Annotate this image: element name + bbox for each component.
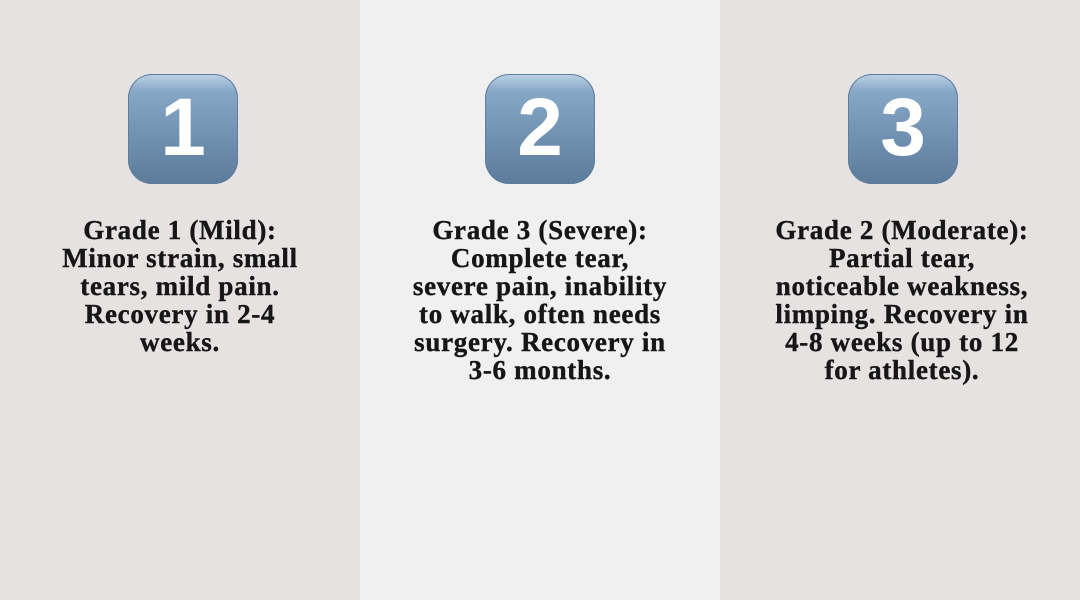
text: grade 2: Partial tear, [829,243,975,273]
icon: number 3 [848,74,958,184]
text: grade 2: Grade 2 (Moderate): [775,215,1029,245]
text: grade 1: weeks. [140,327,220,357]
text: grade 3 [413,215,667,385]
panel: grade 1 [0,0,360,600]
text: grade 1 [62,215,298,357]
text: grade 2: limping. Recovery in [775,299,1029,329]
text: grade 2: noticeable weakness, [776,271,1028,301]
icon: number 3: 3 [880,82,926,173]
text: grade 2: for athletes). [825,355,979,385]
text: grade 3: to walk, often needs [419,299,661,329]
text: grade 1: tears, mild pain. [80,271,280,301]
text: grade 1: Recovery in 2-4 [85,299,275,329]
text: grade 1: Minor strain, small [62,243,298,273]
text: grade 3: severe pain, inability [413,271,667,301]
icon: number 2 [485,74,595,184]
icon: number 1 [128,74,238,184]
text: grade 3: Grade 3 (Severe): [432,215,648,245]
text: grade 3: 3-6 months. [469,355,611,385]
panel: grade 2 [720,0,1080,600]
text: grade 2 [775,215,1029,386]
text: grade 2: 4-8 weeks (up to 12 [785,327,1019,357]
text: grade 3: Complete tear, [451,243,629,273]
icon: number 2: 2 [517,82,563,173]
icon: number 1: 1 [160,82,206,173]
panel: grade 3 [360,0,720,600]
text: grade 3: surgery. Recovery in [414,327,666,357]
text: grade 1: Grade 1 (Mild): [83,215,277,245]
